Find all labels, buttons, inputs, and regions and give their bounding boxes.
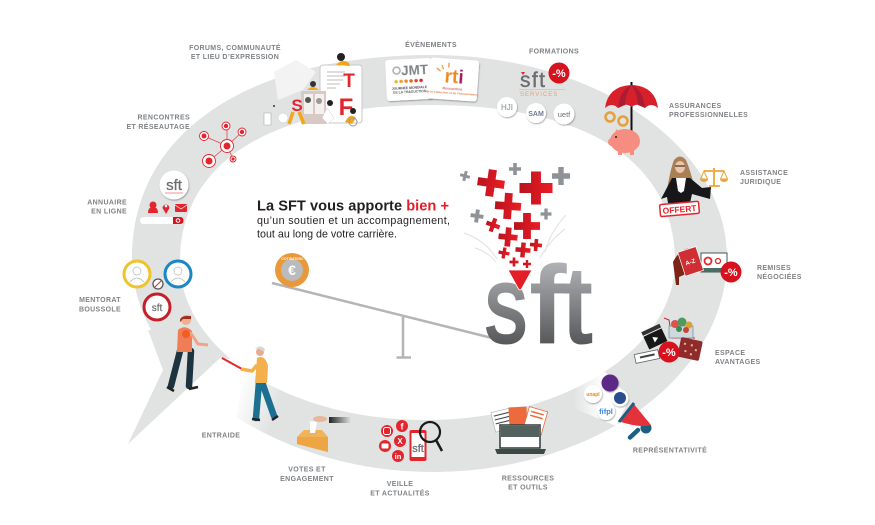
icon: remises: -%	[724, 267, 738, 279]
labels: ANNUAIRE	[87, 200, 127, 206]
wordmark	[485, 244, 592, 366]
card: RTI: Rencontres	[442, 86, 462, 92]
labels: ET OUTILS	[508, 484, 548, 492]
labels: FORUMS, COMMUNAUTÉ	[189, 43, 281, 52]
icon: cotisation coin: €	[288, 262, 296, 278]
icon: forums illustration: S	[291, 96, 303, 115]
icon: formations logos: SERVICES	[520, 92, 558, 98]
labels: RENCONTRES	[137, 114, 190, 122]
icon: veille social and phone: X	[397, 437, 403, 446]
icon: umbrella and piggy bank	[605, 82, 658, 155]
heading and intro text: tout au long de votre carrière.	[257, 228, 397, 240]
icon: veille social and phone: f	[400, 422, 404, 432]
icon: veille social and phone: sft	[412, 443, 424, 455]
seesaw	[272, 283, 492, 358]
icon: rencontres network	[200, 122, 246, 168]
labels: ET LIEU D’EXPRESSION	[191, 54, 279, 61]
wordmark: f	[531, 245, 566, 365]
icon: forums illustration: T	[343, 71, 355, 92]
person right	[241, 346, 278, 420]
labels: BOUSSOLE	[79, 306, 121, 314]
labels: NÉGOCIÉES	[757, 272, 802, 281]
labels: ET RÉSEAUTAGE	[126, 122, 190, 131]
labels: RESSOURCES	[502, 476, 554, 482]
labels: REMISES	[757, 265, 791, 272]
labels: ENGAGEMENT	[280, 476, 334, 483]
swooshes	[464, 215, 566, 262]
labels: VEILLE	[387, 481, 413, 488]
labels: REPRÉSENTATIVITÉ	[633, 446, 707, 454]
labels: FORMATIONS	[529, 48, 579, 56]
labels: AVANTAGES	[715, 359, 761, 366]
icon: representativite megaphone and logos	[584, 374, 652, 438]
card: JMT: DE LA TRADUCTION	[393, 89, 427, 95]
card: RTI	[426, 57, 480, 102]
icon: veille social and phone	[379, 420, 442, 462]
labels: PROFESSIONNELLES	[669, 112, 748, 119]
person left	[167, 315, 208, 391]
baton	[222, 358, 242, 369]
icon: representativite megaphone and logos: fifpl	[599, 407, 613, 416]
white wedge behind partner logos	[573, 372, 630, 426]
heading and intro text: La SFT vous apporte bien +	[257, 198, 449, 214]
labels: EN LIGNE	[91, 208, 127, 216]
icon: formations logos: SAM	[528, 111, 544, 118]
card: JMT	[385, 58, 433, 101]
labels: JURIDIQUE	[740, 179, 781, 186]
badge: discount	[548, 62, 570, 84]
icon: cotisation coin	[275, 253, 309, 287]
icon: espace avantages: -%	[662, 347, 676, 359]
stamp: offert: OFFERT	[662, 203, 698, 216]
panel: grey speech-bubble ring	[128, 55, 727, 472]
icon: formations logos	[497, 62, 574, 124]
card: RTI: rti	[444, 66, 464, 89]
megaphone	[640, 422, 652, 434]
grey plus signs	[459, 163, 570, 223]
card: JMT: JMT	[401, 62, 429, 78]
icon: lawyer with scales	[660, 156, 728, 217]
labels: ESPACE	[715, 350, 745, 357]
labels: VOTES ET	[288, 466, 326, 474]
icon: formations logos: sft	[520, 69, 545, 92]
card: JMT: JOURNÉE MONDIALE	[392, 84, 428, 91]
compass	[153, 279, 163, 289]
icon: evenements cards	[385, 57, 480, 102]
labels: ASSURANCES	[669, 103, 722, 110]
wordmark: t	[563, 246, 592, 366]
icon: formations logos: HJI	[501, 103, 513, 112]
labels: ET ACTUALITÉS	[370, 488, 430, 498]
icon: annuaire member search	[140, 170, 188, 224]
icon: ballot box	[297, 416, 351, 452]
icon: espace avantages	[634, 318, 703, 363]
card: RTI: de la traduction et de l’interprétation	[426, 89, 478, 97]
heading and intro text	[257, 198, 450, 240]
icon: veille social and phone: in	[395, 452, 402, 461]
icon: forums illustration	[264, 53, 362, 126]
icon: representativite megaphone and logos: unapl	[586, 392, 600, 398]
red plus signs	[476, 168, 552, 268]
icon: formations logos: -%	[552, 68, 566, 80]
logo: SFT with rising plus signs	[459, 163, 592, 366]
icon: remises: A-Z	[685, 258, 697, 267]
icon: forums illustration: F	[339, 94, 353, 121]
icon: formations logos: uetf	[558, 110, 571, 119]
labels: MENTORAT	[79, 297, 121, 304]
icon: annuaire member search: sft	[166, 177, 183, 194]
heading and intro text: qu’un soutien et un accompagnement,	[257, 215, 450, 227]
icon: cotisation coin: COTISATION	[281, 257, 303, 261]
wordmark: s	[485, 244, 527, 365]
labels: ÉVÈNEMENTS	[405, 40, 457, 49]
red triangle	[508, 270, 532, 290]
icon: mentorat rings: sft	[152, 303, 162, 314]
labels: ASSISTANCE	[740, 170, 788, 177]
labels	[79, 40, 802, 498]
labels: ENTRAIDE	[202, 432, 240, 440]
icon: remises	[673, 246, 742, 285]
icon: ressources laptop	[491, 407, 548, 454]
icon: mentorat rings	[124, 261, 191, 320]
icon: two people passing a baton	[167, 315, 278, 420]
